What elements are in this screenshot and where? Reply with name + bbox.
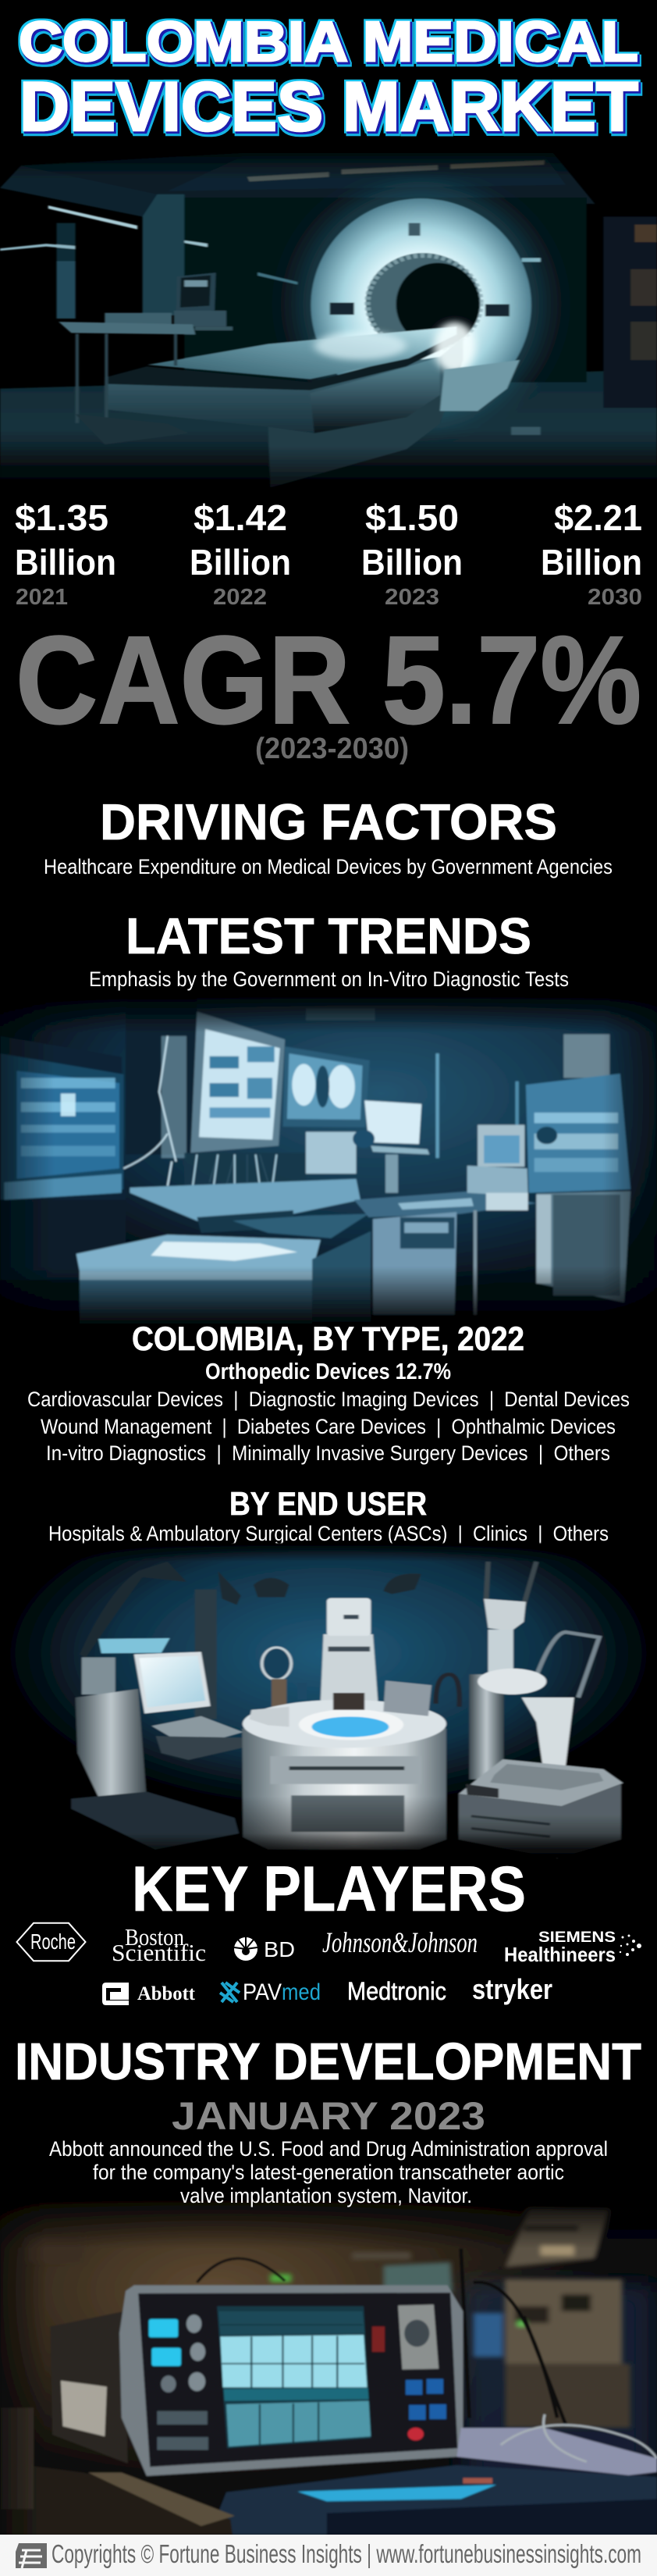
logo: Johnson & Johnson: Johnson&Johnson	[322, 1927, 478, 1959]
stat 2021: 2021	[16, 585, 68, 610]
logo: BD	[234, 1937, 295, 1961]
stat 2023: $1.50	[365, 497, 459, 538]
logo: Abbott: Abbott	[137, 1983, 196, 2004]
image part: right amber panels	[603, 216, 657, 408]
logo: PAVmed: med	[282, 1979, 321, 2005]
stat 2023	[361, 497, 463, 610]
logo: Boston Scientific: Boston	[125, 1923, 184, 1951]
highlight: orthopedic share: Orthopedic Devices 12.7%	[205, 1359, 451, 1384]
image part: right robotic device	[459, 1562, 623, 1860]
image part: bed	[76, 1231, 371, 1324]
logo: Boston Scientific	[112, 1923, 206, 1966]
image part: left monitor	[0, 1053, 123, 1200]
stat 2022: $1.42	[194, 497, 287, 538]
logo: Siemens Healthineers: SIEMENS	[538, 1929, 616, 1946]
heading: by type: COLOMBIA, BY TYPE, 2022	[132, 1320, 524, 1358]
market values by year	[15, 497, 642, 610]
image part: equipment cart and monitor	[59, 273, 233, 444]
logo: Roche: Roche	[30, 1929, 76, 1954]
image part: left console	[71, 1638, 243, 1850]
type list	[27, 1388, 630, 1465]
image part: centre monitors	[190, 1008, 429, 1155]
stat 2022: 2022	[213, 585, 267, 610]
stat 2030: Billion	[541, 542, 642, 583]
stat 2022	[190, 497, 291, 610]
footer bar	[0, 2535, 657, 2576]
stat 2030	[541, 497, 642, 610]
image part: scanner ring	[296, 183, 547, 426]
logo: PAVmed: PAV	[243, 1979, 282, 2005]
image part: background equipment	[25, 2208, 630, 2428]
logo: Abbott	[102, 1983, 196, 2005]
stat 2021: $1.35	[15, 497, 108, 538]
image part: centre cabinet	[373, 1212, 456, 1315]
industry development text: Abbott announced the U.S. Food and Drug Administration approval	[49, 2137, 608, 2161]
image part: desk and keyboards	[130, 1179, 536, 1238]
industry development text: valve implantation system, Navitor.	[180, 2184, 472, 2207]
title: DEVICES MARKET	[20, 67, 638, 145]
image part: desk and tubing	[0, 2407, 657, 2535]
heading: by end user: BY END USER	[229, 1485, 427, 1522]
logo: Siemens Healthineers: Healthineers	[504, 1943, 616, 1966]
stat 2030: $2.21	[554, 497, 642, 538]
image: patient monitor	[0, 2195, 657, 2535]
stat 2022: Billion	[190, 542, 291, 583]
logo: Roche	[17, 1923, 86, 1961]
industry development month: JANUARY 2023	[172, 2094, 485, 2138]
image part: scanner table	[105, 322, 520, 487]
industry development text	[49, 2137, 608, 2207]
logo: Siemens Healthineers	[504, 1929, 641, 1966]
logos: key players	[17, 1923, 641, 2005]
title: COLOMBIA MEDICAL	[19, 11, 638, 73]
logo: Boston Scientific: Scientific	[112, 1939, 206, 1966]
image part: monitor body	[50, 2286, 463, 2476]
image part: hanging lamps	[80, 1562, 421, 1719]
industry development text: for the company's latest-generation transcatheter aortic	[93, 2161, 564, 2184]
stat 2021	[15, 497, 116, 610]
heading: latest trends: LATEST TRENDS	[126, 907, 531, 964]
logo: stryker: stryker	[472, 1973, 552, 2005]
heading: driving factors: DRIVING FACTORS	[100, 793, 557, 850]
image part: right equipment	[467, 1035, 630, 1315]
stat 2021: Billion	[15, 542, 116, 583]
image: medical monitors lab	[0, 994, 657, 1327]
latest trends text: Emphasis by the Government on In-Vitro Diagnostic Tests	[89, 967, 569, 991]
heading: key players: KEY PLAYERS	[132, 1854, 526, 1925]
logo: Medtronic: Medtronic	[347, 1977, 446, 2005]
stat 2023: Billion	[361, 542, 463, 583]
image: medical devices group	[0, 1543, 657, 1860]
title	[19, 11, 638, 145]
image part: centre analyzer	[242, 1598, 460, 1851]
stat 2030: 2030	[588, 585, 642, 610]
stat 2023: 2023	[385, 585, 439, 610]
CAGR period: (2023-2030)	[255, 732, 409, 765]
image: MRI scanner room	[0, 141, 657, 500]
logo: PAVmed	[220, 1979, 321, 2005]
logo: BD: BD	[264, 1937, 295, 1961]
icon: Fortune Business Insights logo	[16, 2543, 47, 2568]
